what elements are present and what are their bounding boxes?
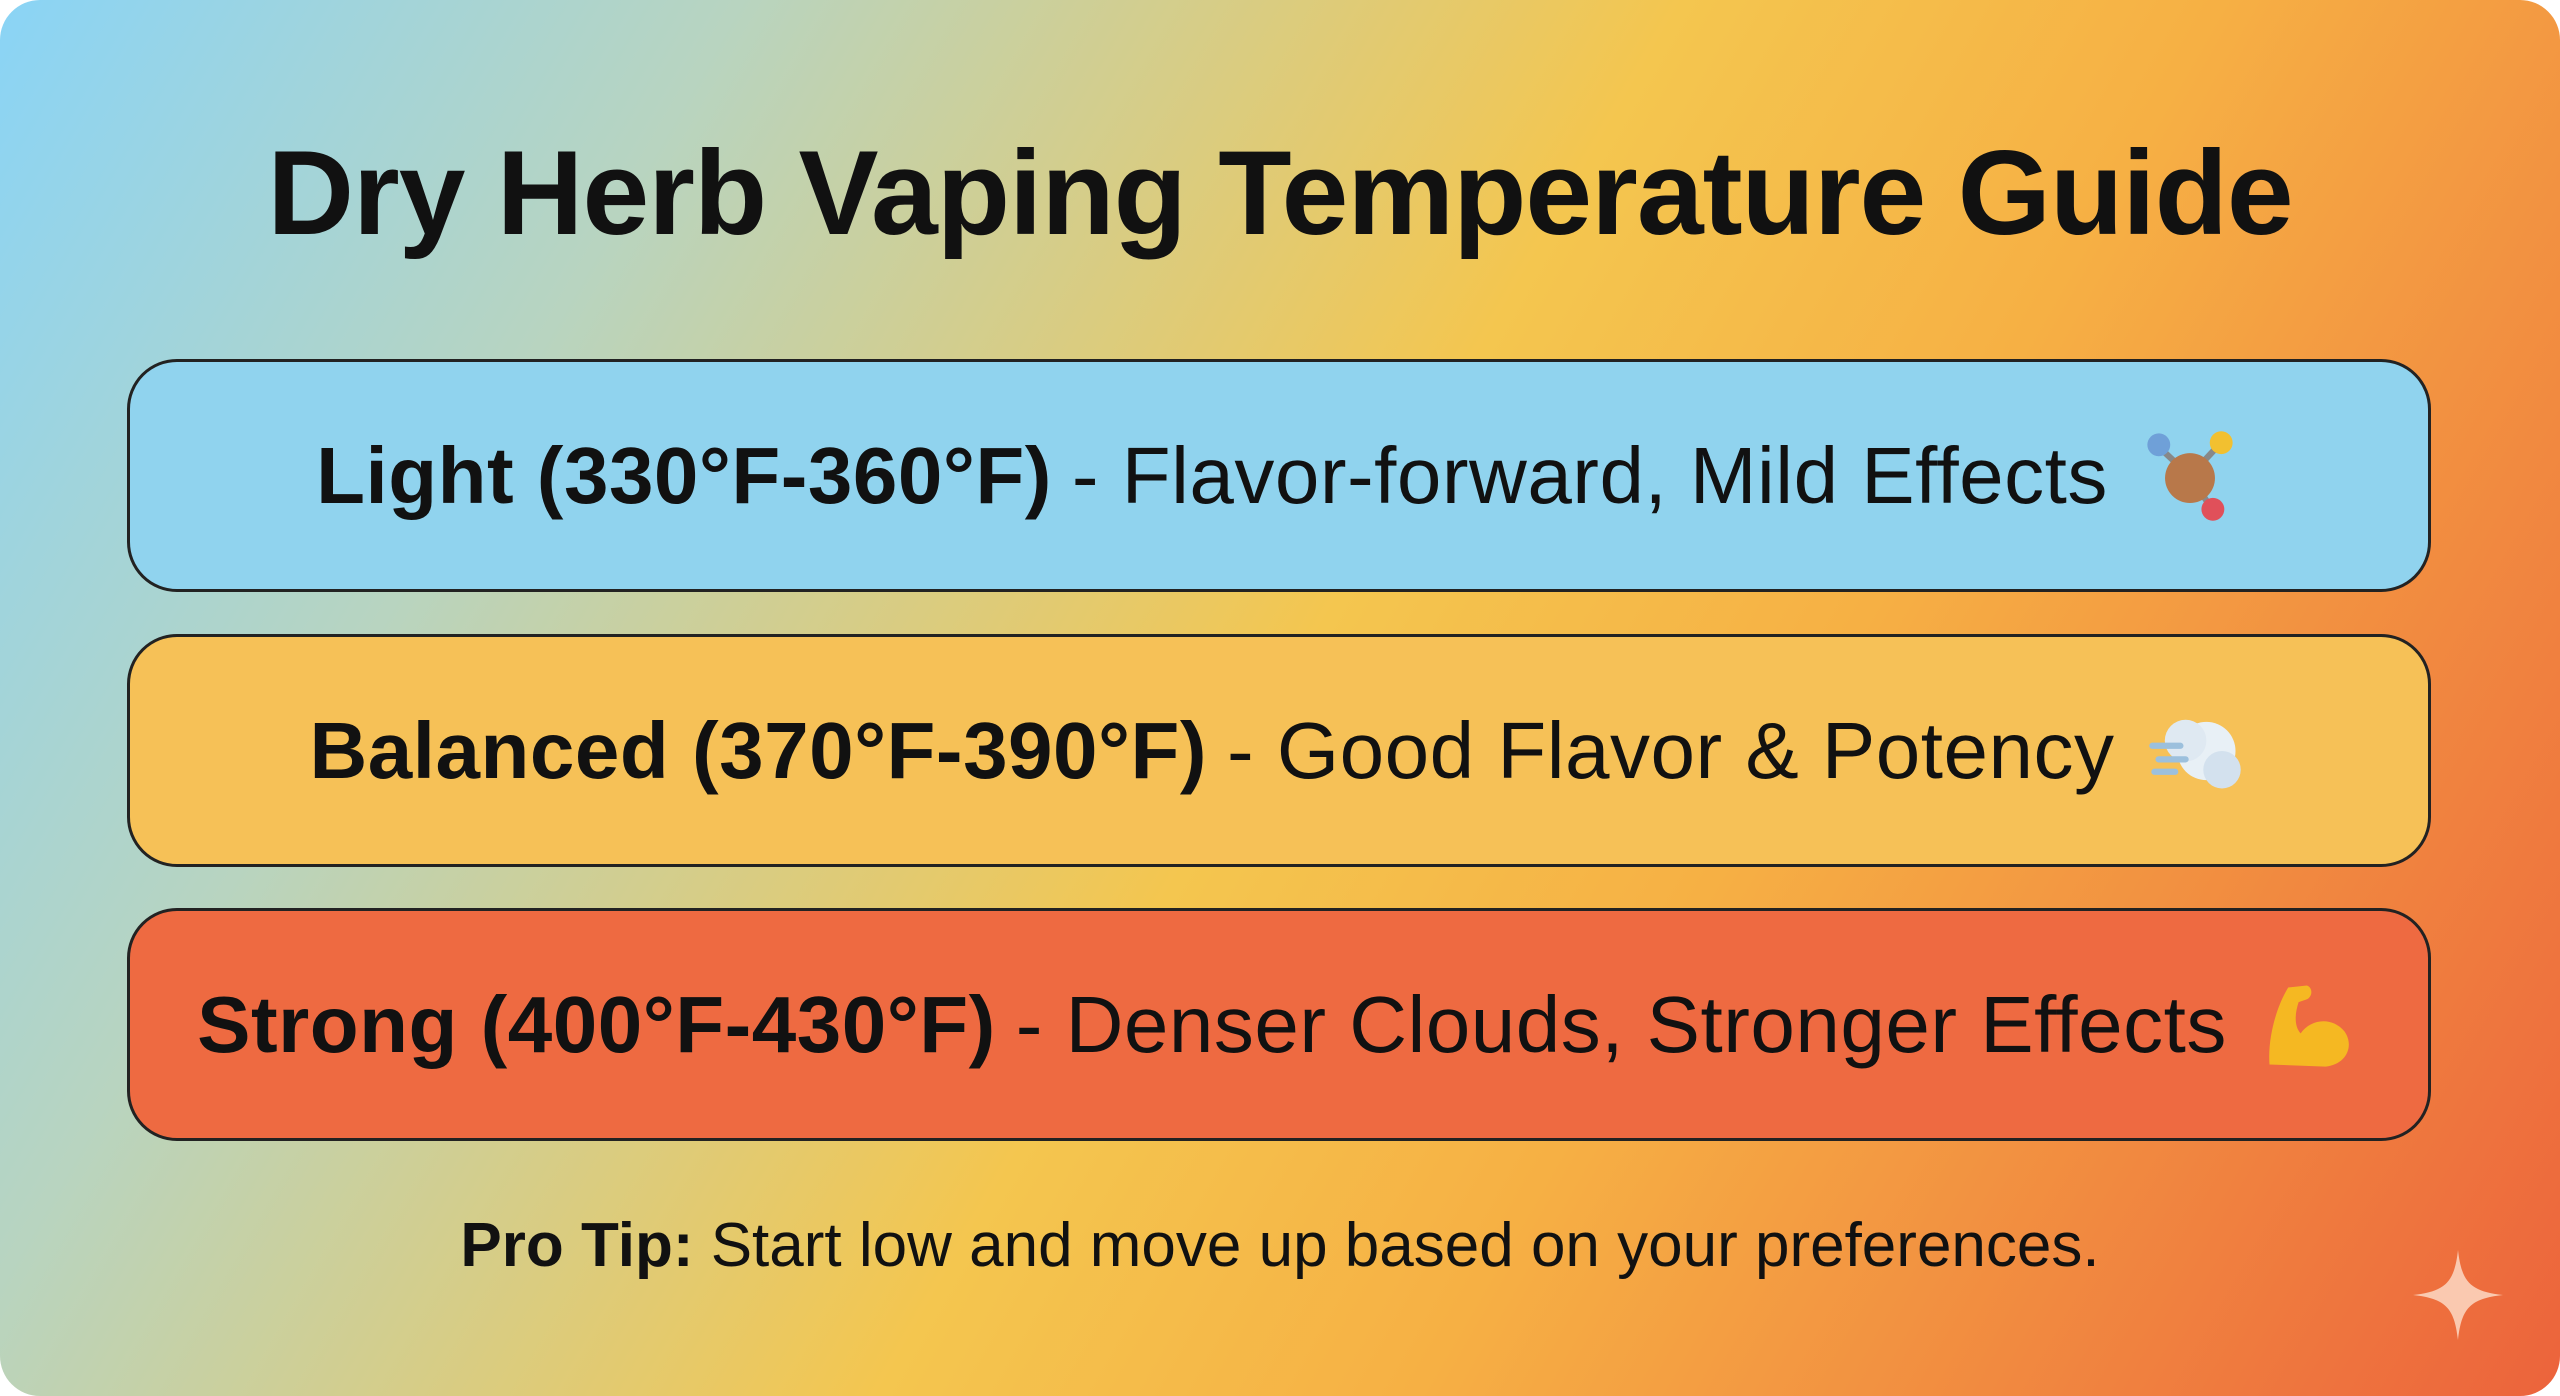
pro tip: Pro Tip: Start low and move up based on your preferences. <box>460 1211 2100 1280</box>
panel: strong: - Denser Clouds, Stronger Effects <box>1016 980 2227 1068</box>
icon: cloud puff <box>2149 720 2241 788</box>
icon: sparkle <box>2413 1250 2502 1340</box>
title: Dry Herb Vaping Temperature Guide <box>267 126 2293 260</box>
panel: light <box>127 359 2431 592</box>
panel: light: Light (330°F-360°F) <box>316 430 1052 520</box>
panel: balanced <box>127 634 2431 867</box>
panel: strong <box>127 908 2431 1141</box>
icon: flexed biceps <box>2269 986 2349 1067</box>
icon: molecule <box>2147 431 2233 521</box>
panel: balanced: - Good Flavor & Potency <box>1227 706 2114 794</box>
panel: strong: Strong (400°F-430°F) <box>197 980 996 1068</box>
panel: balanced: Balanced (370°F-390°F) <box>310 706 1207 794</box>
panel: light: - Flavor-forward, Mild Effects <box>1072 430 2108 520</box>
